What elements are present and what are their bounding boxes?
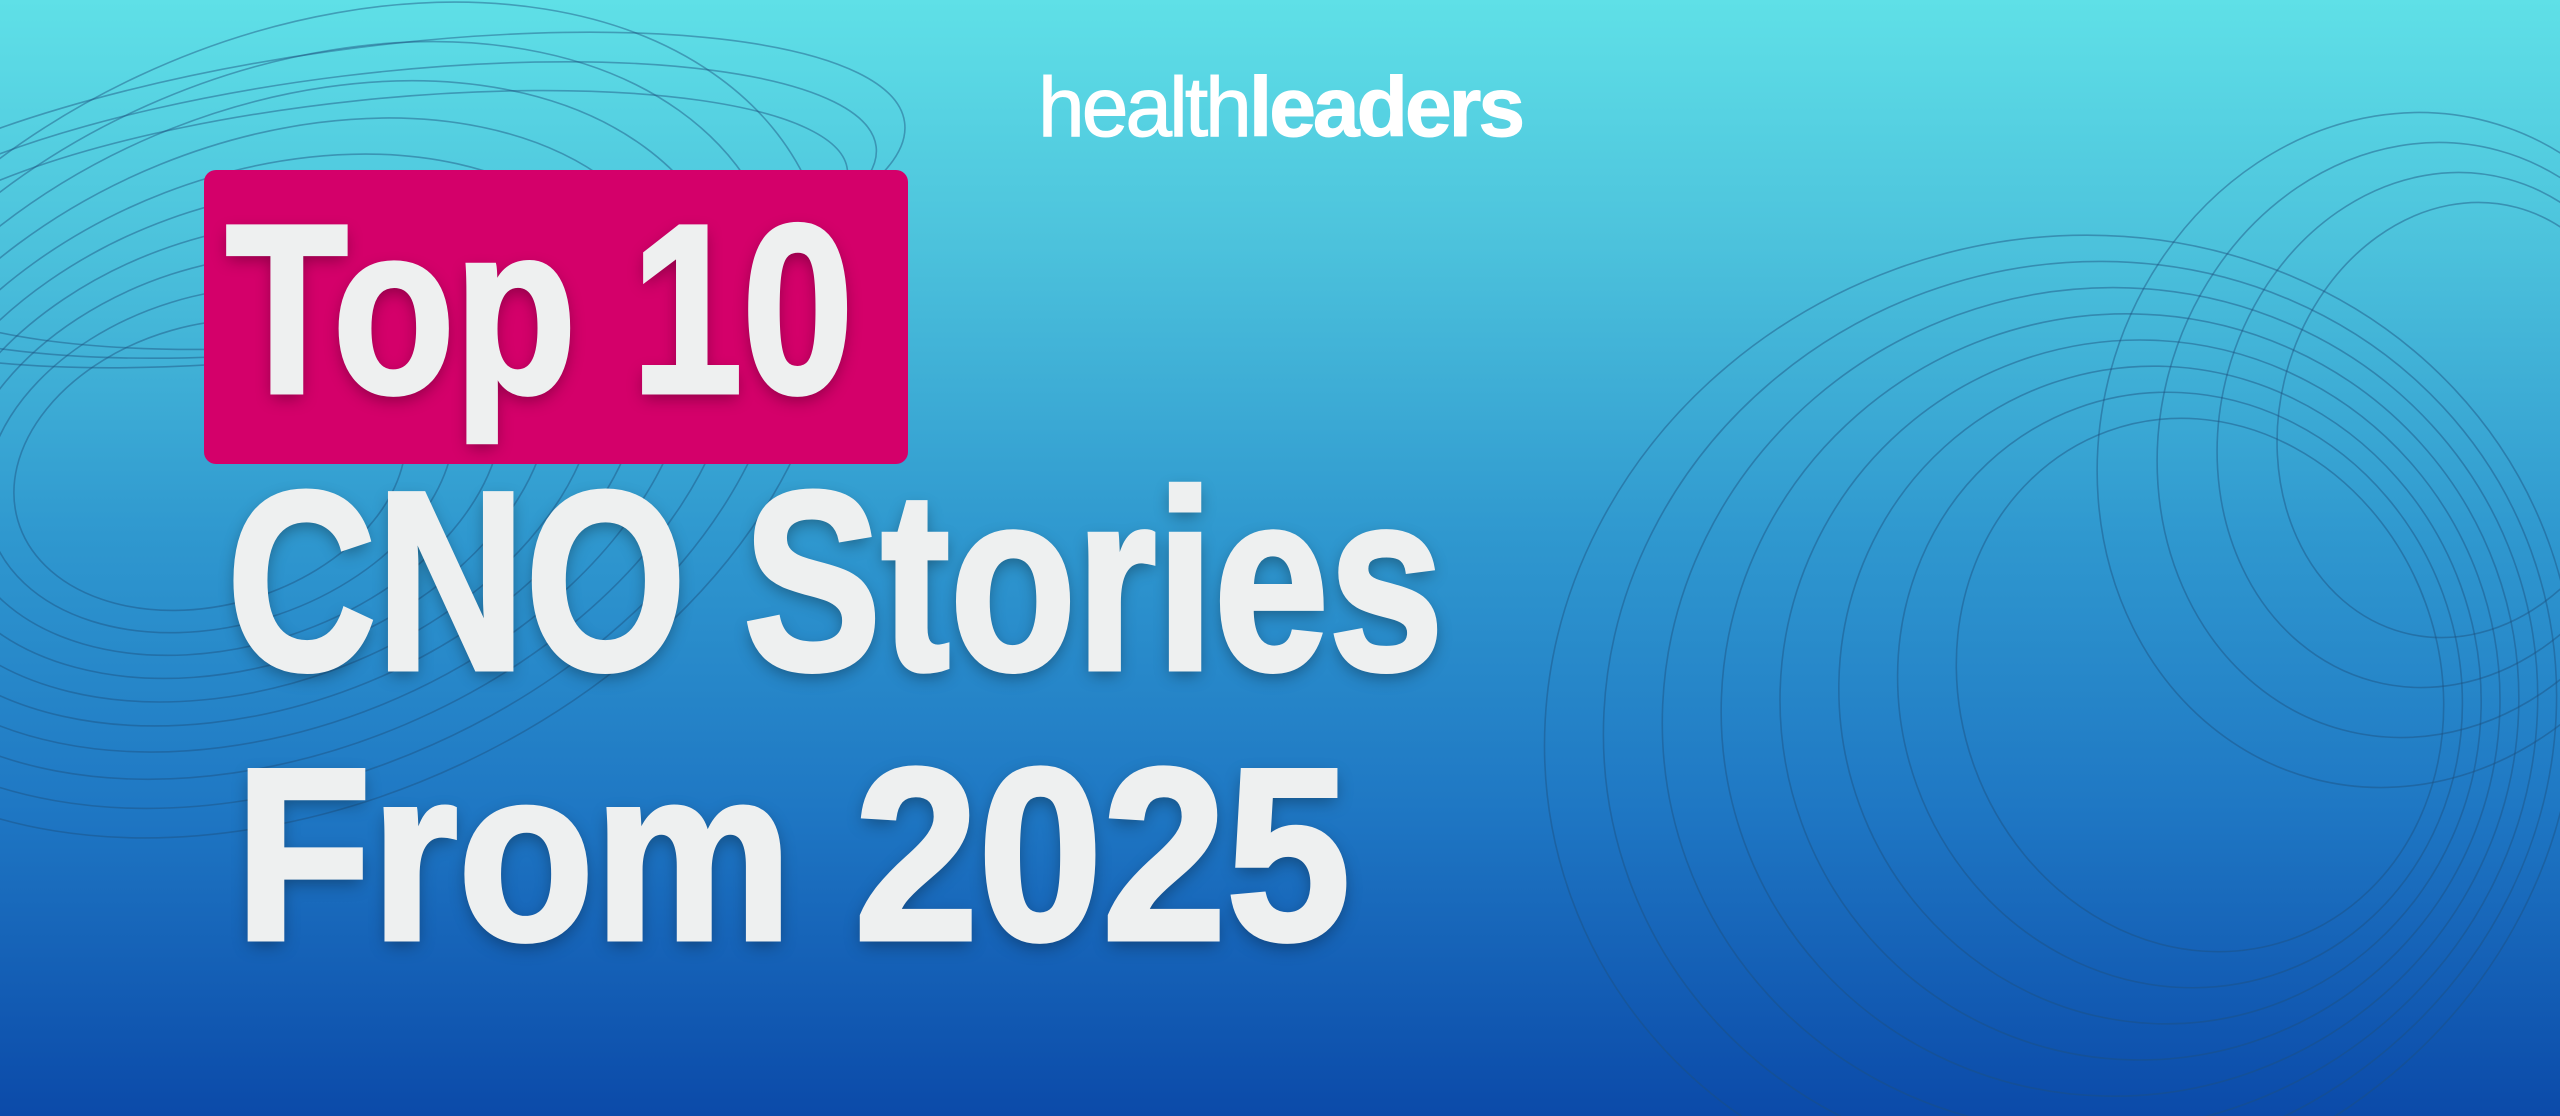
title line 2: CNO Stories: CNO Stories — [227, 439, 1444, 724]
pink highlight box — [204, 170, 908, 464]
title line 1: Top 10: Top 10 — [226, 175, 853, 443]
logo: healthleaders: healthleaders — [1038, 60, 1522, 154]
title line 3: From 2025: From 2025 — [235, 717, 1350, 991]
